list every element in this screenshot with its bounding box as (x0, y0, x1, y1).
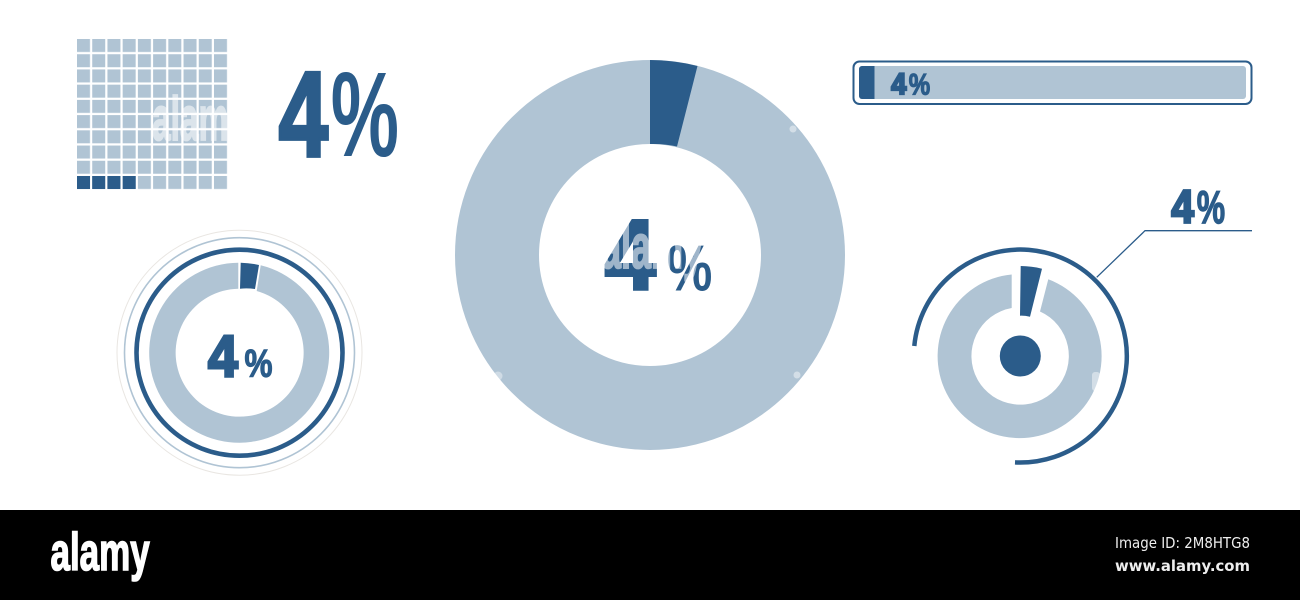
watermark over central value: alamy (601, 212, 703, 281)
large percentage label (279, 47, 399, 182)
progress bar value: 4 (891, 67, 907, 100)
left donut value: % (244, 341, 273, 385)
large percentage label: 4 (279, 48, 328, 182)
right exploded donut chart (914, 250, 1127, 463)
website: www.alamy.com (1115, 557, 1250, 575)
progress bar value: % (909, 67, 930, 101)
image id: Image ID: 2M8HTG8 (1115, 534, 1250, 552)
alamy logo: alamy (50, 522, 150, 582)
left donut value: 4 (208, 323, 238, 389)
central donut value: 4 (605, 201, 656, 311)
right chart value: % (1197, 182, 1225, 233)
left ringed donut chart (117, 230, 362, 475)
watermark over waffle: alam (152, 84, 228, 154)
central donut chart (494, 60, 803, 408)
progress bar value (891, 67, 930, 101)
large percentage label: % (331, 47, 399, 182)
right chart value: 4 (1171, 182, 1194, 233)
footer band (0, 510, 1300, 600)
leader line (1097, 231, 1252, 277)
waffle chart: 4 of 100 squares (77, 39, 228, 190)
progress bar (854, 62, 1252, 104)
right chart value (1171, 182, 1225, 233)
central donut value (605, 201, 712, 311)
left donut value (208, 323, 273, 389)
central donut value: % (667, 233, 712, 305)
